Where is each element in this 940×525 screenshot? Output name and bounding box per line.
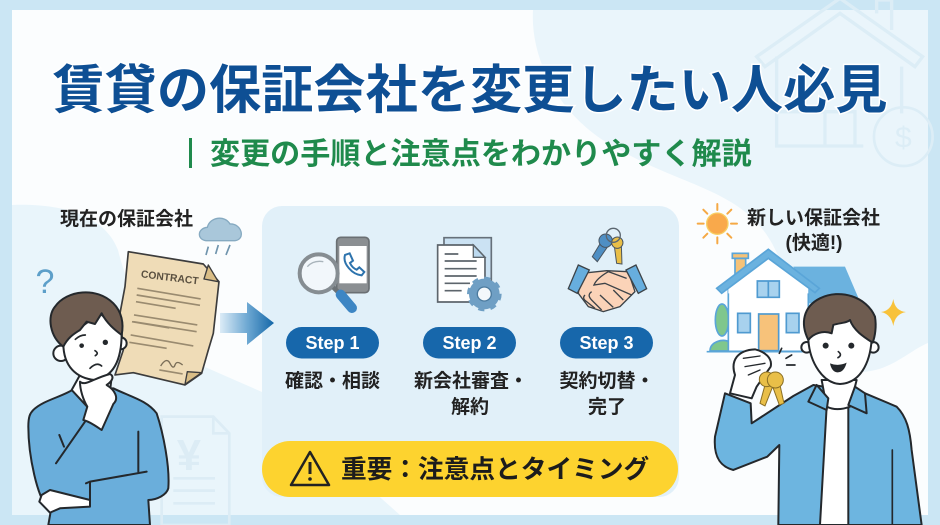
panel: steps: [262, 206, 679, 497]
arrow: [220, 302, 274, 345]
icon: sun: [698, 204, 737, 243]
step 1 label: 確認・相談: [285, 370, 380, 392]
character: happy man with keys: [715, 294, 922, 525]
icon: rain cloud: [199, 218, 241, 255]
watermark: yen document: [162, 417, 229, 525]
step 1 badge: Step 1: [305, 333, 360, 353]
step 2 label: 解約: [451, 396, 489, 418]
title: 賃貸の保証会社を変更したい人必見: [52, 62, 888, 120]
contract document: CONTRACT: [140, 269, 200, 287]
icon: magnifier and phone: [300, 237, 369, 308]
step 3 label: 完了: [588, 396, 626, 418]
icon: sparkle: [881, 299, 906, 326]
step 1 badge: [286, 327, 379, 358]
subtitle: 変更の手順と注意点をわかりやすく解説: [210, 138, 752, 171]
watermark: house and dollar: $: [895, 121, 912, 154]
step 2 badge: Step 2: [442, 333, 497, 353]
icon: documents and gear: [438, 238, 500, 309]
step 3 badge: Step 3: [579, 333, 634, 353]
label: new company: 新しい保証会社: [747, 207, 880, 229]
icon: warning: [291, 452, 329, 485]
label: current company: 現在の保証会社: [60, 208, 193, 230]
watermark: house and dollar: [757, 0, 933, 166]
icon: handshake and keys: [568, 228, 647, 312]
callout: important: [262, 441, 678, 497]
label: new company: (快適!): [786, 232, 842, 254]
callout: important: 重要：注意点とタイミング: [341, 454, 650, 484]
step 2 badge: [423, 327, 516, 358]
watermark: yen document: ¥: [177, 432, 201, 480]
illustration: house: [707, 249, 860, 352]
step 3 label: 契約切替・: [559, 370, 655, 392]
character: worried man: [28, 292, 169, 525]
step 2 label: 新会社審査・: [414, 370, 528, 392]
step 3 badge: [560, 327, 653, 358]
icon: question mark: ?: [36, 263, 54, 301]
contract document: [115, 252, 219, 385]
